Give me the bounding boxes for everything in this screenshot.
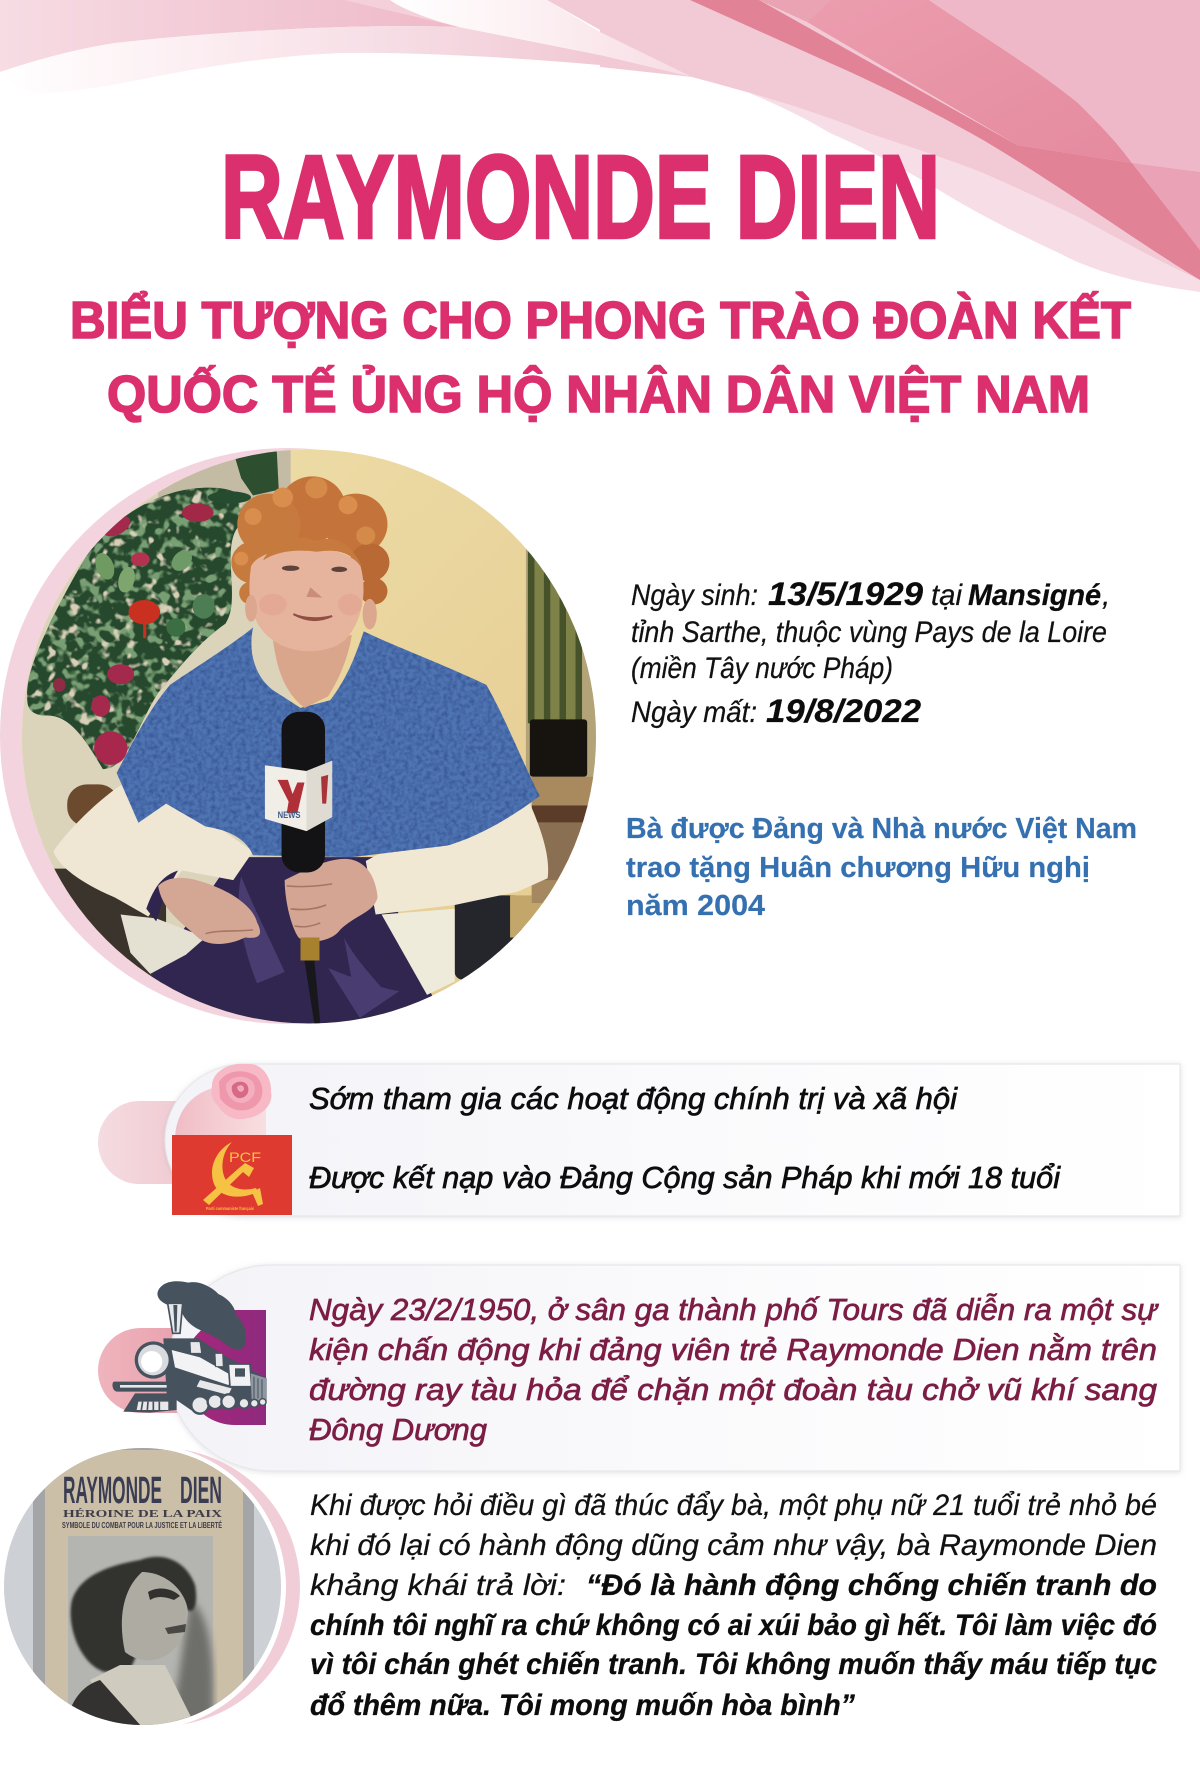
- pink pill behind second panel: [98, 1328, 218, 1413]
- pink pill behind first panel: [98, 1101, 218, 1184]
- engine body: [163, 1338, 267, 1412]
- panel text: đường ray tàu hỏa để chặn một đoàn tàu chở vũ khí sang: [309, 1372, 1157, 1407]
- sleeve cuff: [146, 871, 178, 921]
- icon: PCF flag: [172, 1135, 292, 1215]
- quotation paragraph: Khi được hỏi điều gì đã thúc đẩy bà, một phụ nữ 21 tuổi trẻ nhỏ bé: [310, 1489, 1157, 1522]
- quotation paragraph: khi đó lại có hành động dũng cảm như vậy, bà Raymonde Dien: [310, 1529, 1157, 1562]
- panel text: kiện chấn động khi đảng viên trẻ Raymonde Dien nằm trên: [309, 1332, 1157, 1367]
- face: [245, 537, 377, 651]
- quotation paragraph: [310, 1489, 1157, 1722]
- icon: steam locomotive: [112, 1281, 267, 1414]
- pink crescent behind portrait: [0, 448, 576, 1024]
- quotation paragraph: đổ thêm nữa. Tôi mong muốn hòa bình”: [310, 1689, 855, 1722]
- poster photo: Raymonde Dien, héroïne de la paix: HÉROINE DE LA PAIX: [63, 1508, 222, 1520]
- poster photo: Raymonde Dien, héroïne de la paix: [4, 1448, 281, 1725]
- wheels: [191, 1396, 209, 1414]
- biography facts: ,: [1102, 579, 1110, 612]
- biography facts: tỉnh Sarthe, thuộc vùng Pays de la Loire: [631, 616, 1107, 649]
- panel text: Ngày 23/2/1950, ở sân ga thành phố Tours đã diễn ra một sự: [309, 1292, 1159, 1327]
- cowcatcher: [123, 1393, 177, 1413]
- wall background: [22, 450, 596, 1024]
- award note in blue: năm 2004: [626, 890, 765, 922]
- subtitle: [70, 291, 1131, 424]
- funnel: [168, 1303, 183, 1333]
- quotation paragraph: khảng khái trả lời:: [310, 1569, 566, 1602]
- white ring of poster: [0, 1444, 286, 1730]
- hands: [158, 859, 378, 944]
- purple satin dress: [146, 857, 435, 1037]
- hair: [231, 476, 389, 605]
- panel text: Được kết nạp vào Đảng Cộng sản Pháp khi mới 18 tuổi: [309, 1160, 1061, 1195]
- biography facts: tại: [931, 579, 963, 612]
- poster title: RAYMONDE: [63, 1470, 162, 1512]
- panel text: [309, 1292, 1159, 1447]
- portrait photo of Raymonde Dien: [22, 450, 596, 1024]
- pink tab inside panel: [175, 1085, 266, 1140]
- award note in blue: [626, 813, 1137, 922]
- bamboo plant: [528, 551, 599, 899]
- icon: PCF flag: Parti communiste français: [206, 1206, 254, 1211]
- biography facts: Mansigné: [968, 579, 1101, 612]
- cream cardigan: [53, 784, 548, 995]
- biography facts: [631, 576, 1110, 729]
- poster photo: Raymonde Dien, héroïne de la paix: DIEN: [180, 1470, 222, 1512]
- award note in blue: Bà được Đảng và Nhà nước Việt Nam: [626, 813, 1137, 845]
- microphone with news cube: [265, 712, 332, 1024]
- icon: PCF flag: PCF: [229, 1149, 261, 1165]
- panel: early political activity: [165, 1064, 1180, 1216]
- award note in blue: trao tặng Huân chương Hữu nghị: [626, 852, 1090, 884]
- knitted blue shawl: [117, 628, 540, 857]
- front beam: [112, 1382, 175, 1392]
- panel text: [309, 1081, 1061, 1195]
- pink crescent behind poster: [22, 1448, 300, 1726]
- icon: rose: [211, 1064, 271, 1119]
- subtitle: BIỂU TƯỢNG CHO PHONG TRÀO ĐOÀN KẾT: [70, 291, 1131, 350]
- plant with red flowers: [27, 451, 279, 769]
- panel text: Sớm tham gia các hoạt động chính trị và xã hội: [309, 1081, 958, 1116]
- biography facts: Ngày mất:: [631, 696, 757, 729]
- wheelchair: [47, 784, 589, 983]
- purple tab: [182, 1310, 266, 1425]
- quotation paragraph: vì tôi chán ghét chiến tranh. Tôi không muốn thấy máu tiếp tục: [310, 1648, 1157, 1681]
- poster portrait: [68, 1536, 213, 1736]
- poster title: [64, 1476, 221, 1504]
- panel: train protest 1950: [112, 1265, 1180, 1471]
- panel text: Đông Dương: [309, 1412, 487, 1447]
- smoke: [157, 1281, 246, 1349]
- quotation paragraph: chính tôi nghĩ ra chứ không có ai xúi bảo gì hết. Tôi làm việc đó: [310, 1609, 1157, 1642]
- biography facts: 19/8/2022: [766, 693, 921, 729]
- neck: [273, 635, 352, 708]
- top wave decoration: [0, 0, 1200, 292]
- biography facts: (miền Tây nước Pháp): [631, 652, 893, 685]
- microphone with news cube: NEWS: [278, 810, 301, 820]
- biography facts: 13/5/1929: [768, 576, 923, 612]
- poster photo: Raymonde Dien, héroïne de la paix: SYMBOLE DU COMBAT POUR LA JUSTICE ET LA LIBERTÉ: [62, 1521, 222, 1530]
- biography facts: Ngày sinh:: [631, 579, 758, 612]
- boiler face: [135, 1341, 172, 1379]
- title: RAYMONDE DIEN: [221, 132, 940, 264]
- quotation paragraph: “Đó là hành động chống chiến tranh do: [586, 1569, 1157, 1602]
- subtitle: QUỐC TẾ ỦNG HỘ NHÂN DÂN VIỆT NAM: [107, 365, 1090, 424]
